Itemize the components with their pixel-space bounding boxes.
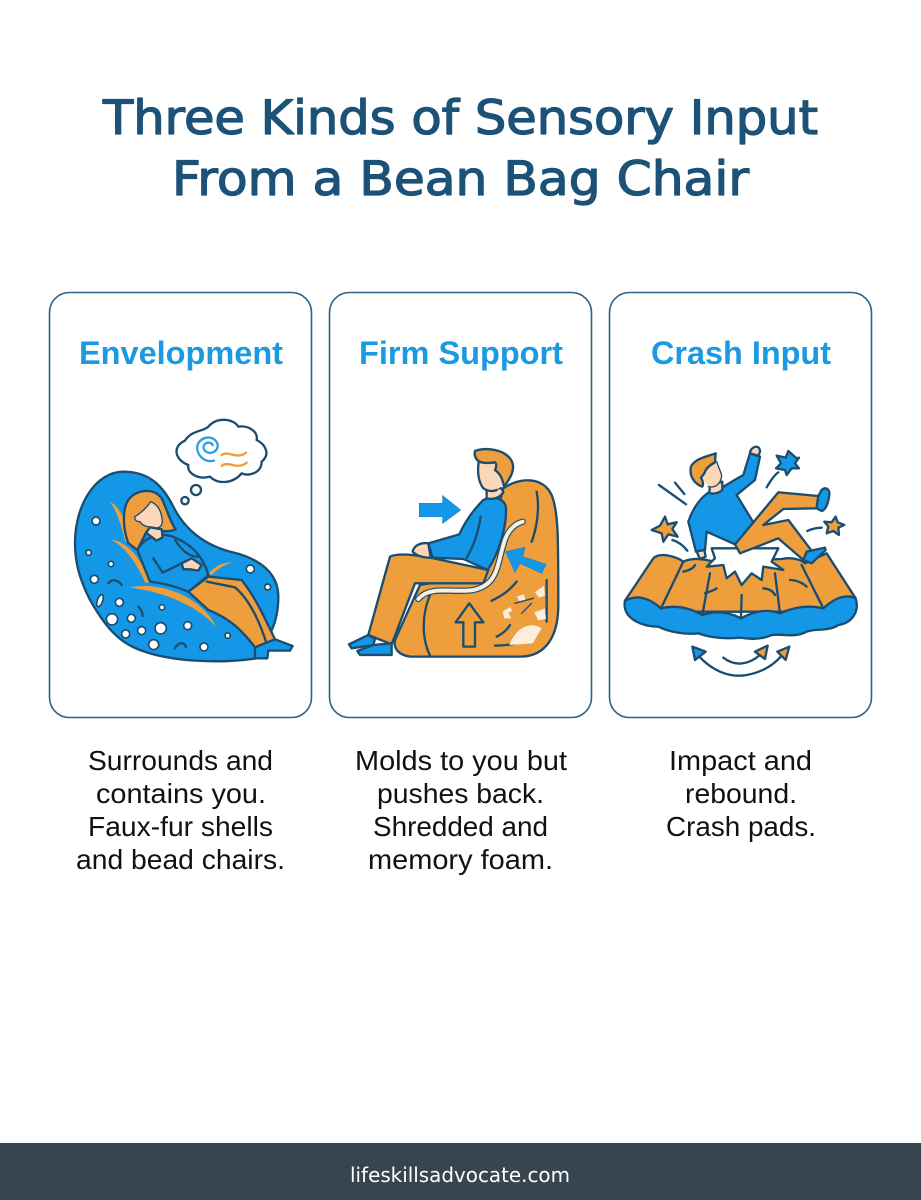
panel: crash input (610, 292, 872, 718)
title: From a Bean Bag Chair (172, 152, 750, 207)
arrow: pressing in from the front (419, 496, 461, 523)
illustration: person on firm bean bag (349, 449, 558, 657)
text block: firm support description: Shredded and (373, 811, 548, 842)
text block: envelopment description: and bead chairs. (76, 844, 285, 875)
beads (86, 517, 271, 651)
heading: envelopment: Envelopment (79, 335, 283, 371)
illustration: person crashing onto pad (625, 447, 857, 676)
text block: envelopment description: contains you. (96, 778, 266, 809)
footer bar: lifeskillsadvocate.com (350, 1163, 570, 1187)
thought bubble (177, 420, 266, 504)
text block: envelopment description: Faux-fur shells (88, 811, 273, 842)
heading: firm support: Firm Support (359, 335, 563, 371)
panel: envelopment (50, 292, 312, 718)
text block: crash input description: Crash pads. (666, 811, 816, 842)
text block: firm support description: pushes back. (377, 778, 544, 809)
text block: firm support description: Molds to you but (355, 745, 567, 776)
text block: crash input description: Impact and (669, 745, 812, 776)
arrow: pushing back from the chair (506, 547, 546, 573)
title: Three Kinds of Sensory Input (102, 91, 818, 146)
text block: envelopment description: Surrounds and (88, 745, 273, 776)
text block: envelopment description (76, 745, 285, 875)
text block: crash input description (666, 745, 816, 842)
footer bar (0, 1143, 921, 1200)
title (102, 91, 818, 207)
text block: crash input description: rebound. (685, 778, 797, 809)
panel: firm support (330, 292, 592, 718)
heading: crash input: Crash Input (651, 335, 831, 371)
illustration: person enveloped in bean bag (75, 420, 293, 661)
shredded foam (503, 586, 546, 645)
text block: firm support description (355, 745, 567, 875)
text block: firm support description: memory foam. (368, 844, 553, 875)
rebound arrows (692, 646, 789, 676)
